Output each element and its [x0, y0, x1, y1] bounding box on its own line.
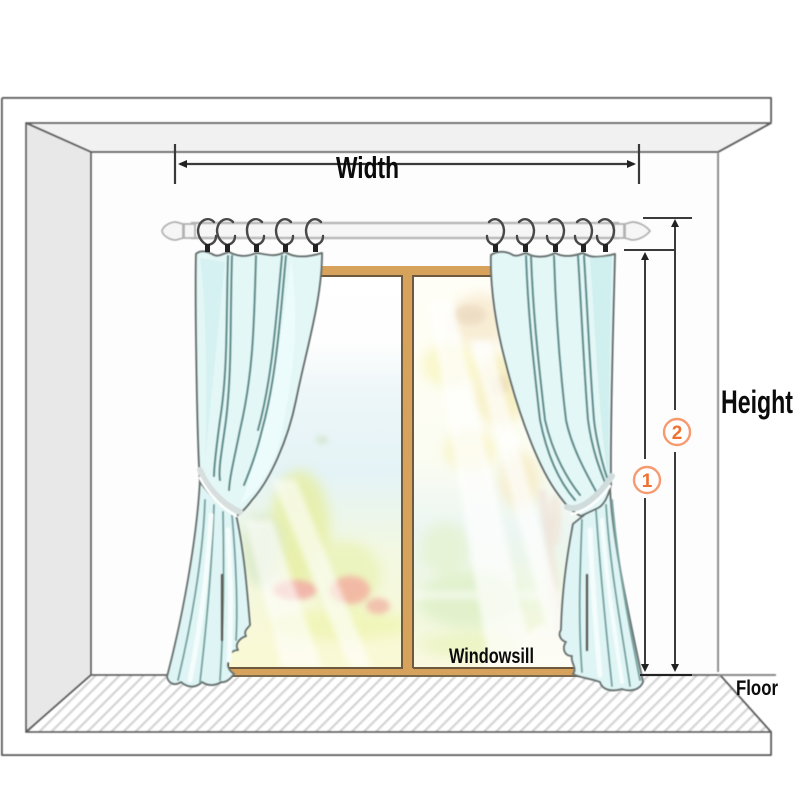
hatched floor: [26, 675, 771, 732]
left curtain rings: [198, 219, 323, 252]
left curtain tieback: [200, 470, 240, 512]
curtain rod with finials: [162, 222, 650, 240]
windowsill label: Windowsill: [449, 645, 534, 668]
right finial: [614, 222, 650, 240]
height dimension 2: [643, 218, 692, 672]
window frame inner edges: [224, 276, 590, 676]
window: [224, 266, 590, 677]
room shell: [2, 98, 776, 755]
left curtain upper panel: [196, 251, 322, 516]
right curtain lower drape: [560, 488, 643, 690]
right curtain upper panel: [491, 252, 615, 516]
left window pane scene: [228, 276, 410, 668]
width label: Width: [336, 150, 399, 185]
marker circle 2: 2: [672, 423, 682, 444]
marker circle 1: 1: [642, 471, 653, 492]
right window pane scene: [413, 276, 585, 668]
outer frame outline: [2, 98, 771, 755]
right curtain rings: [487, 219, 614, 252]
width dimension arrow: [175, 144, 639, 184]
marker circle 1: [634, 467, 660, 493]
right curtain tieback: [567, 476, 612, 508]
left curtain: [167, 251, 322, 686]
marker circle 2: [664, 419, 690, 445]
ceiling: [26, 123, 771, 152]
left curtain lower drape: [167, 480, 250, 686]
left finial: [162, 222, 195, 240]
back wall: [91, 152, 718, 675]
right wall line: [718, 152, 776, 675]
left side wall: [26, 123, 91, 732]
floor baseline marker: [640, 674, 692, 676]
height dimension 1: [624, 250, 675, 672]
right curtain: [491, 252, 643, 690]
floor label: Floor: [736, 677, 778, 700]
